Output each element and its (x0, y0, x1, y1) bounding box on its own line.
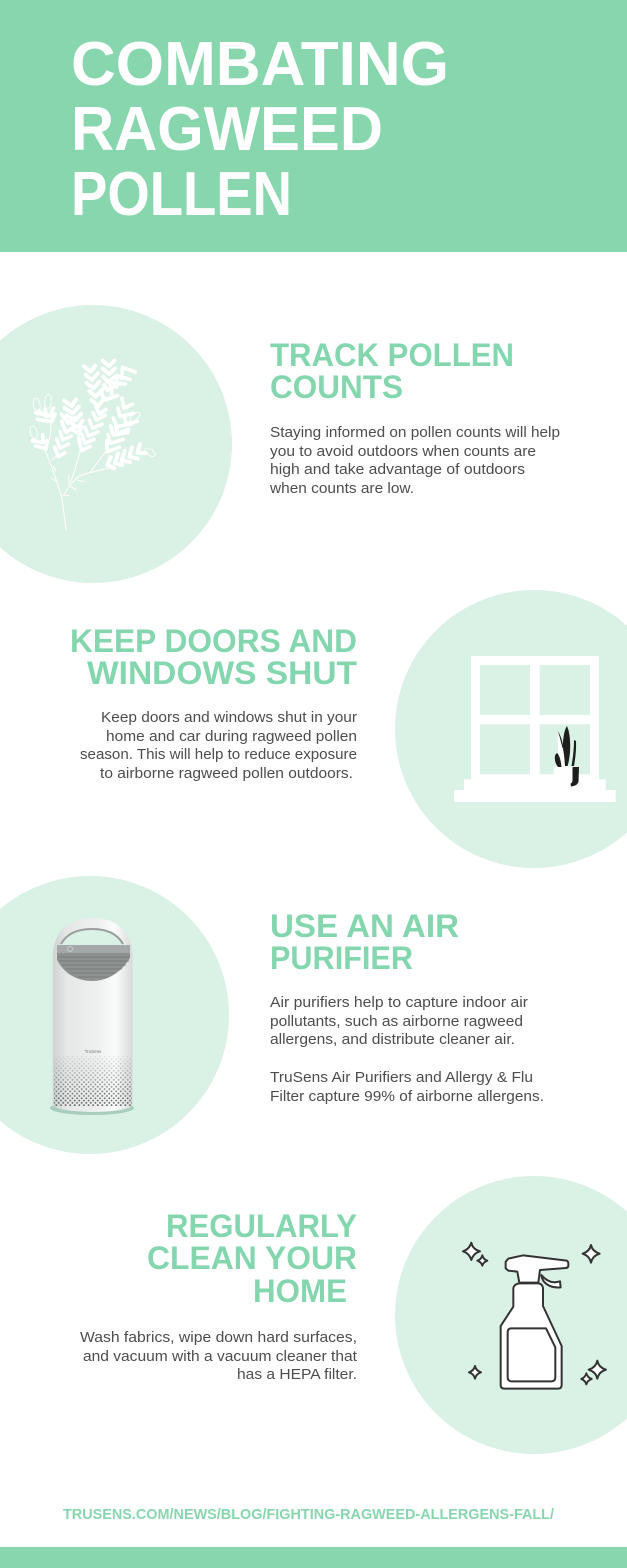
panel: keep doors and windows shut (70, 590, 627, 868)
text block: keep doors and windows shut: season. This will help to reduce exposure (80, 746, 357, 763)
panel: track pollen counts (0, 305, 560, 583)
text block: use an air purifier: Air purifiers help to capture indoor air (270, 994, 528, 1011)
bottle label (508, 1328, 555, 1381)
source link: TRUSENS.COM/NEWS/BLOG/FIGHTING-RAGWEED-ALLERGENS-FALL/ (63, 1506, 555, 1523)
text block: keep doors and windows shut (80, 709, 357, 782)
circle background 2 (395, 590, 627, 868)
title: COMBATING (71, 30, 449, 99)
text block: track pollen counts (269, 424, 560, 497)
footer band (0, 1547, 627, 1568)
heading: track pollen counts (270, 337, 514, 405)
text block: use an air purifier: TruSens Air Purifiers and Allergy & Flu (270, 1069, 533, 1086)
sparkle bottom right (589, 1361, 606, 1379)
panel: regularly clean your home (80, 1176, 627, 1454)
text block: track pollen counts: when counts are low. (269, 480, 414, 497)
title (71, 30, 449, 229)
heading: use an air purifier: PURIFIER (270, 940, 413, 976)
text block: use an air purifier: pollutants, such as airborne ragweed (270, 1013, 523, 1030)
purifier body (53, 918, 133, 1112)
text block: regularly clean your home: and vacuum with a vacuum cleaner that (83, 1348, 358, 1365)
sparkle bottom left (469, 1366, 481, 1379)
brand label: TruSens (85, 1049, 102, 1054)
plant pot (554, 767, 579, 787)
heading: keep doors and windows shut: WINDOWS SHUT (87, 655, 357, 691)
title: POLLEN (71, 160, 292, 229)
text block: keep doors and windows shut: home and car during ragweed pollen (106, 728, 357, 745)
icon: window with plant (454, 656, 616, 802)
text block: regularly clean your home (80, 1329, 358, 1383)
text block: regularly clean your home: has a HEPA filter. (237, 1366, 357, 1383)
heading: track pollen counts: COUNTS (270, 369, 403, 405)
text block: track pollen counts: you to avoid outdoors when counts are (270, 443, 536, 460)
heading: regularly clean your home (147, 1208, 357, 1309)
text block: use an air purifier: Filter capture 99% of airborne allergens. (270, 1088, 544, 1105)
text block: track pollen counts: high and take advantage of outdoors (270, 461, 525, 478)
icon: air purifier (50, 918, 134, 1115)
text block: keep doors and windows shut: to airborne ragweed pollen outdoors. (100, 765, 353, 782)
sparkle top right (583, 1245, 600, 1263)
control strip (57, 945, 130, 953)
icon: spray bottle with sparkles (463, 1243, 606, 1389)
circle background 3 (0, 876, 229, 1154)
heading: regularly clean your home: REGULARLY (166, 1208, 357, 1244)
text block: use an air purifier (270, 994, 544, 1105)
heading: keep doors and windows shut: KEEP DOORS AND (70, 623, 357, 659)
circle background 1 (0, 305, 232, 583)
heading: use an air purifier: USE AN AIR (270, 908, 459, 944)
text block: keep doors and windows shut: Keep doors and windows shut in your (101, 709, 357, 726)
handle opening (60, 928, 124, 945)
base shadow (50, 1101, 134, 1115)
text block: use an air purifier: allergens, and distribute cleaner air. (270, 1031, 515, 1048)
perforated vent (54, 1056, 132, 1106)
icon: ragweed sprig (29, 361, 157, 530)
text block: regularly clean your home: Wash fabrics, wipe down hard surfaces, (80, 1329, 357, 1346)
trigger head (506, 1255, 568, 1283)
louvre grille (57, 945, 130, 981)
panel: use an air purifier (0, 876, 544, 1154)
heading: regularly clean your home: HOME (253, 1273, 347, 1309)
heading: keep doors and windows shut (70, 623, 357, 691)
heading: track pollen counts: TRACK POLLEN (270, 337, 514, 373)
heading: use an air purifier (270, 908, 459, 976)
heading: regularly clean your home: CLEAN YOUR (147, 1240, 357, 1276)
circle background 4 (395, 1176, 627, 1454)
title: RAGWEED (71, 95, 383, 164)
header band (0, 0, 627, 252)
text block: track pollen counts: Staying informed on pollen counts will help (270, 424, 560, 441)
sparkle top left (463, 1243, 480, 1260)
bottle body (501, 1283, 562, 1389)
